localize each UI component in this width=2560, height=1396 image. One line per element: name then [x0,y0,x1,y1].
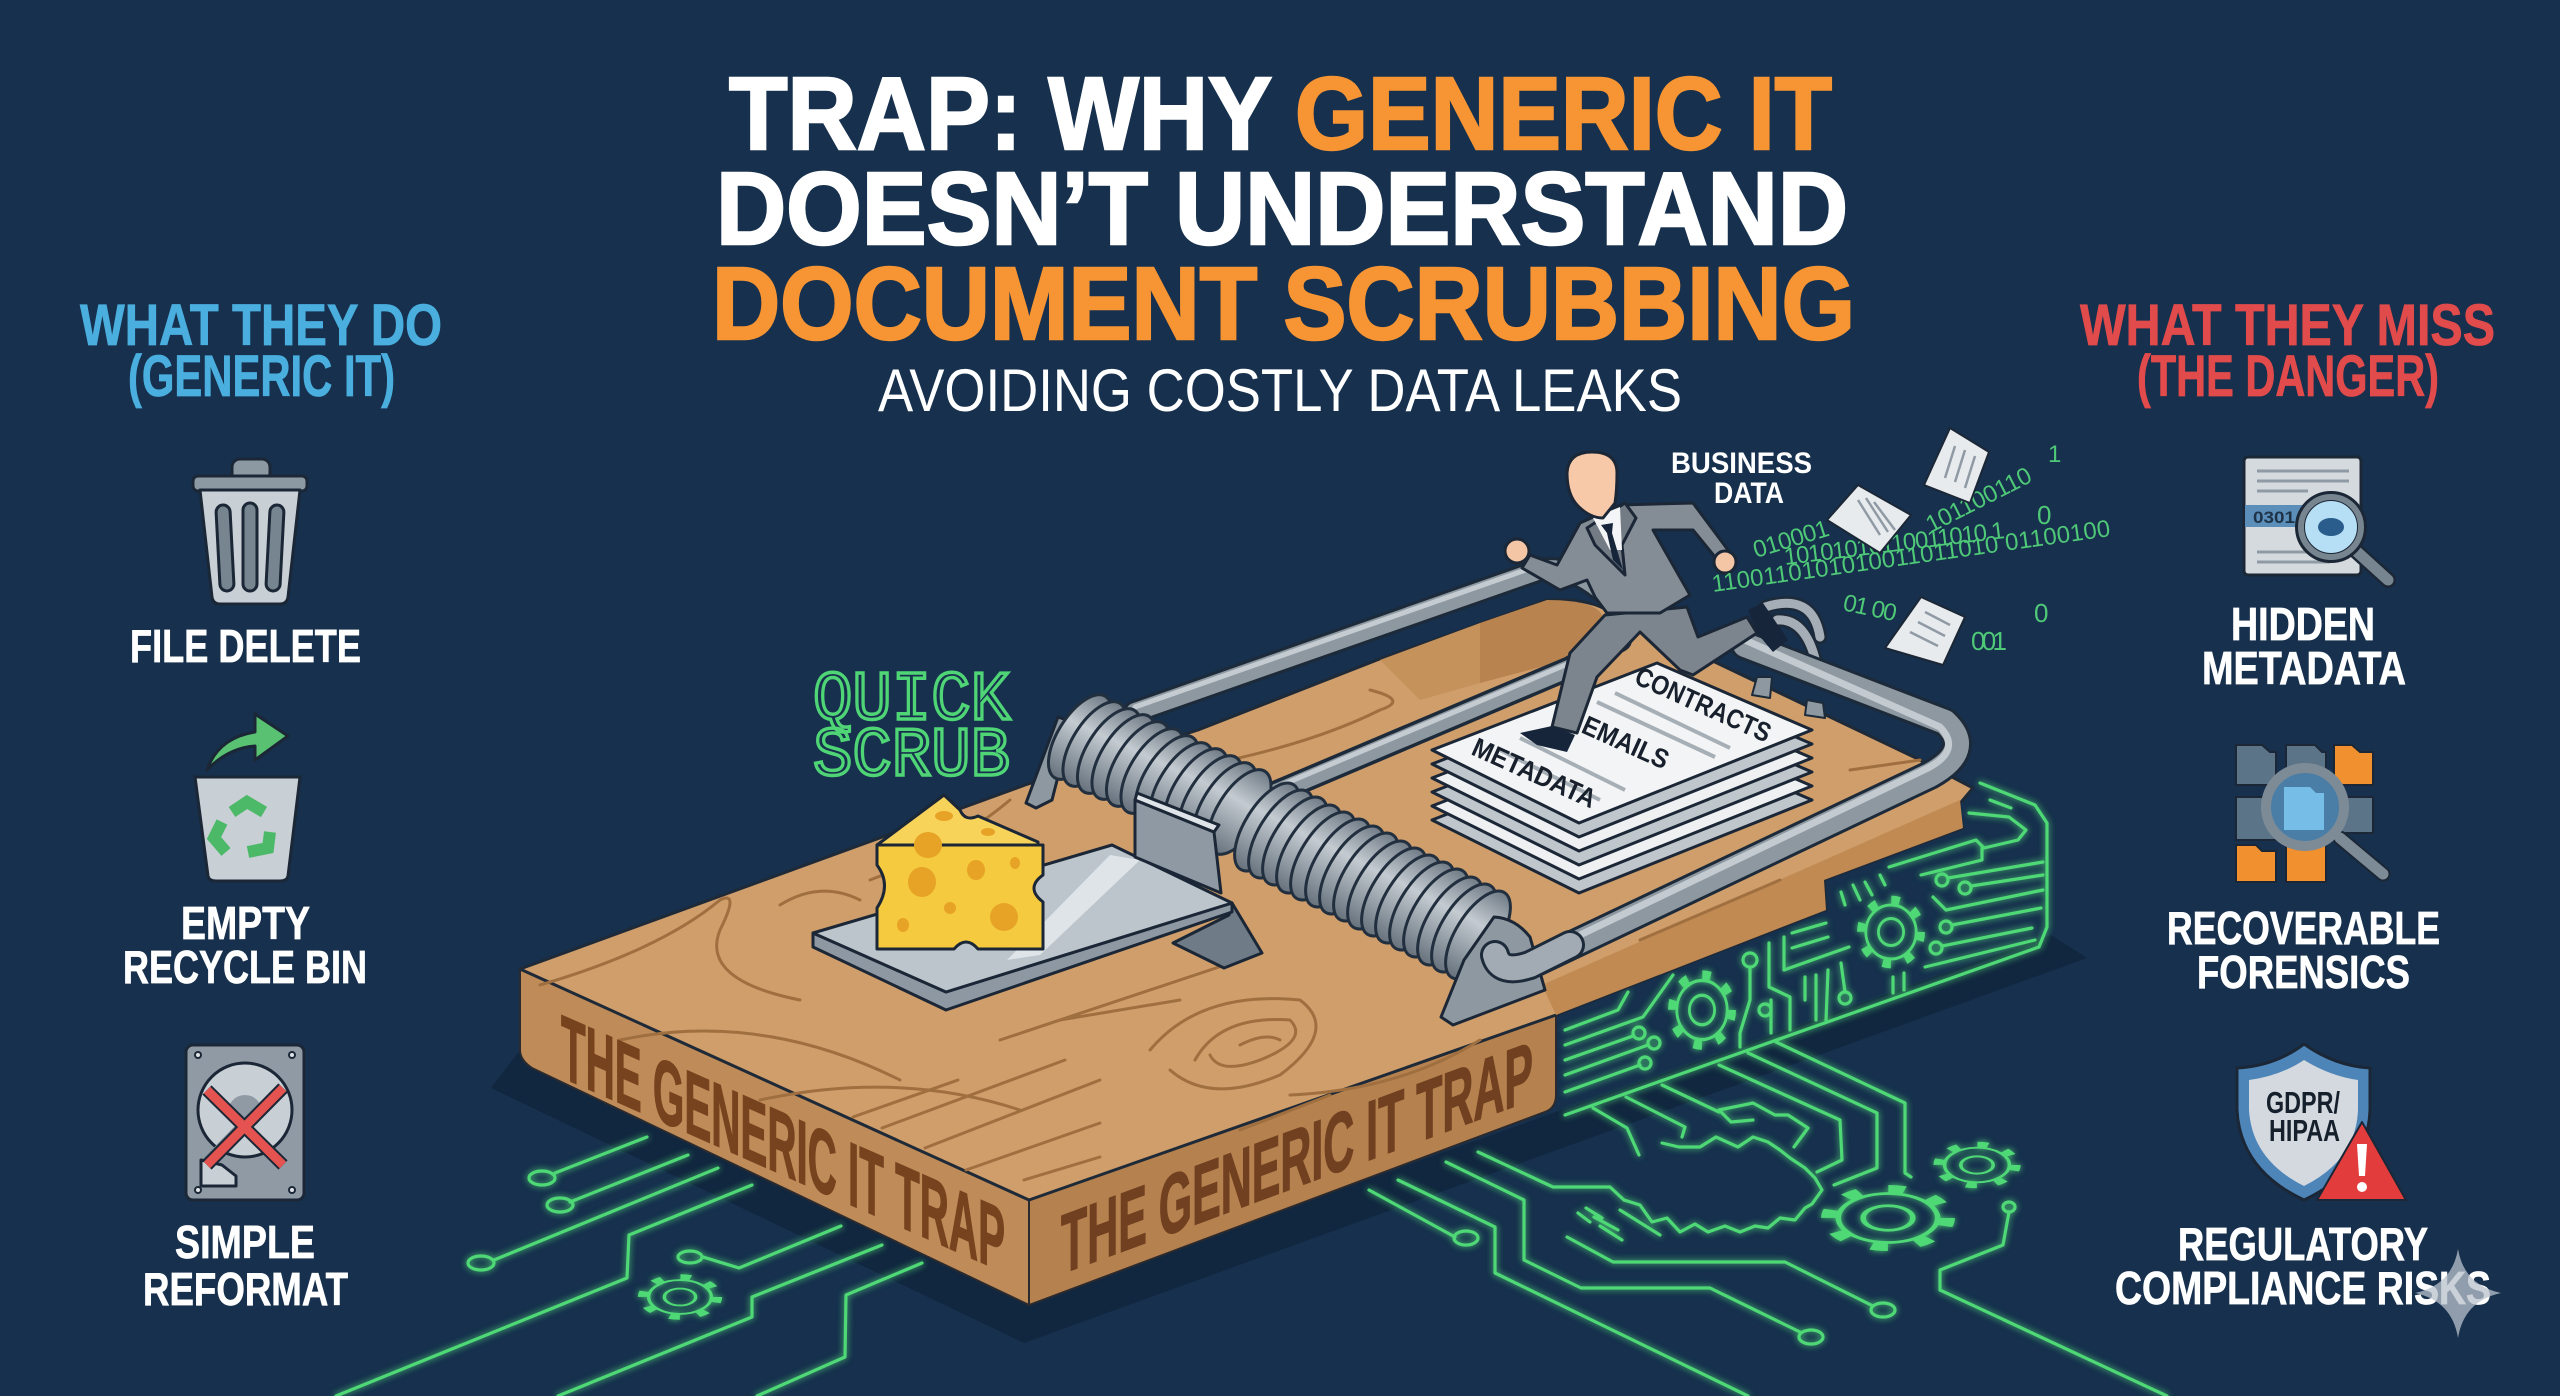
heading: what they do [80,293,442,409]
label: hidden metadata: HIDDEN [2231,598,2375,650]
label: recoverable forensics: FORENSICS [2197,946,2410,998]
label: simple reformat: REFORMAT [143,1263,348,1315]
coil rings: right [1222,773,1523,989]
coil bracket: front [1441,917,1545,1025]
coil spring [813,685,1570,1025]
icon: compliance shield with warning: HIPAA [2269,1113,2340,1148]
figure: running businessman [1505,452,1788,752]
icon: document with magnifier [2244,457,2388,580]
lapels [1587,503,1636,575]
board: left face [520,969,1029,1305]
binary data stream: 10101010110011010 1 [1782,517,2006,571]
jacket and sleeves [1522,503,1728,613]
icon: folders with magnifier [2236,745,2383,882]
flying papers [1827,428,1989,665]
title: TRAP: WHY [729,56,1272,171]
label: recoverable forensics: RECOVERABLE [2167,902,2440,954]
gear outline: broken [1624,1103,1822,1232]
cheese [877,795,1043,949]
board ground shadow [491,935,2087,1343]
binary data stream [1710,441,2112,656]
board: right face [1029,1015,1556,1305]
paper stack: CONTRACTS [1631,661,1776,748]
label: file delete: FILE DELETE [130,620,361,672]
icon: recycle bin [195,714,300,881]
heading: what they miss [2080,293,2495,409]
quick scrub label: SCRUB [813,718,1010,797]
trigger upright [1135,793,1221,893]
icon: hard drive with cross [186,1045,304,1200]
title: DOESN’T UNDERSTAND [716,151,1848,266]
rails: snap bar [1135,565,1957,968]
shirt and tie [1593,507,1623,570]
trouser legs [1552,607,1757,733]
binary data stream: 01 00 [1841,589,1899,627]
label: simple reformat: SIMPLE [175,1216,315,1268]
title: DOCUMENT SCRUBBING [712,246,1855,361]
icon: trash can [193,459,307,604]
heading: what they do: WHAT THEY DO [80,293,442,358]
icon: sparkle [2415,1249,2501,1338]
label: regulatory compliance risks [2115,1218,2491,1314]
label: simple reformat [143,1216,348,1315]
rail hook [1752,603,1825,718]
binary data stream: 010001 [1750,515,1832,564]
mousetrap [520,565,1973,1305]
label: business data: BUSINESS [1671,447,1812,480]
label: hidden metadata [2202,598,2406,694]
icon: compliance shield with warning: GDPR/ [2266,1085,2340,1120]
binary data stream: 0 [2037,500,2051,530]
circuit: lower left [336,1137,922,1396]
board side text: right: THE GENERIC IT TRAP [1061,1024,1533,1292]
label: regulatory compliance risks: REGULATORY [2178,1218,2428,1270]
title: GENERIC IT [1295,56,1832,171]
paper stack: METADATA [1468,732,1601,814]
board: top [520,600,1973,1200]
label: business data: DATA [1714,477,1784,510]
coil rings: left [1036,685,1284,864]
binary data stream: 1100110101010011011010 01100100 [1710,515,2112,598]
head [1567,452,1617,518]
title [712,56,1855,361]
circuit traces [336,783,2167,1396]
icon: compliance shield with warning [2237,1044,2406,1200]
binary data stream: 101100110 [1921,462,2036,538]
trigger plate [813,793,1262,1010]
panel: what they do [80,293,442,1315]
label: business data [1671,447,1812,510]
circuit: board edge [1565,783,2047,1115]
binary data stream: 001 [1971,626,2007,656]
binary data stream: 0 [2034,598,2048,628]
front shoe [1520,726,1575,752]
icon: document with magnifier: 0301 [2253,508,2295,527]
label: hidden metadata: METADATA [2202,642,2406,694]
heading: what they miss: (THE DANGER) [2137,344,2439,409]
panel: what they miss [2080,293,2501,1338]
paper stack [1432,661,1812,893]
subtitle: AVOIDING COSTLY DATA LEAKS [878,357,1682,424]
binary data stream: 1 [2048,441,2061,468]
hands [1505,539,1736,573]
label: recoverable forensics [2167,902,2440,998]
label: empty recycle bin [123,897,367,993]
quick scrub label [813,662,1010,797]
heading: what they do: (GENERIC IT) [128,344,395,409]
circuit: lower right [1369,1042,2167,1396]
coil bracket: rear [1026,717,1072,808]
quick scrub label: QUICK [813,662,1010,741]
label: empty recycle bin: EMPTY [181,897,310,949]
paper stack: EMAILS [1578,710,1674,775]
rear shoe [1748,603,1788,652]
label: empty recycle bin: RECYCLE BIN [123,941,367,993]
